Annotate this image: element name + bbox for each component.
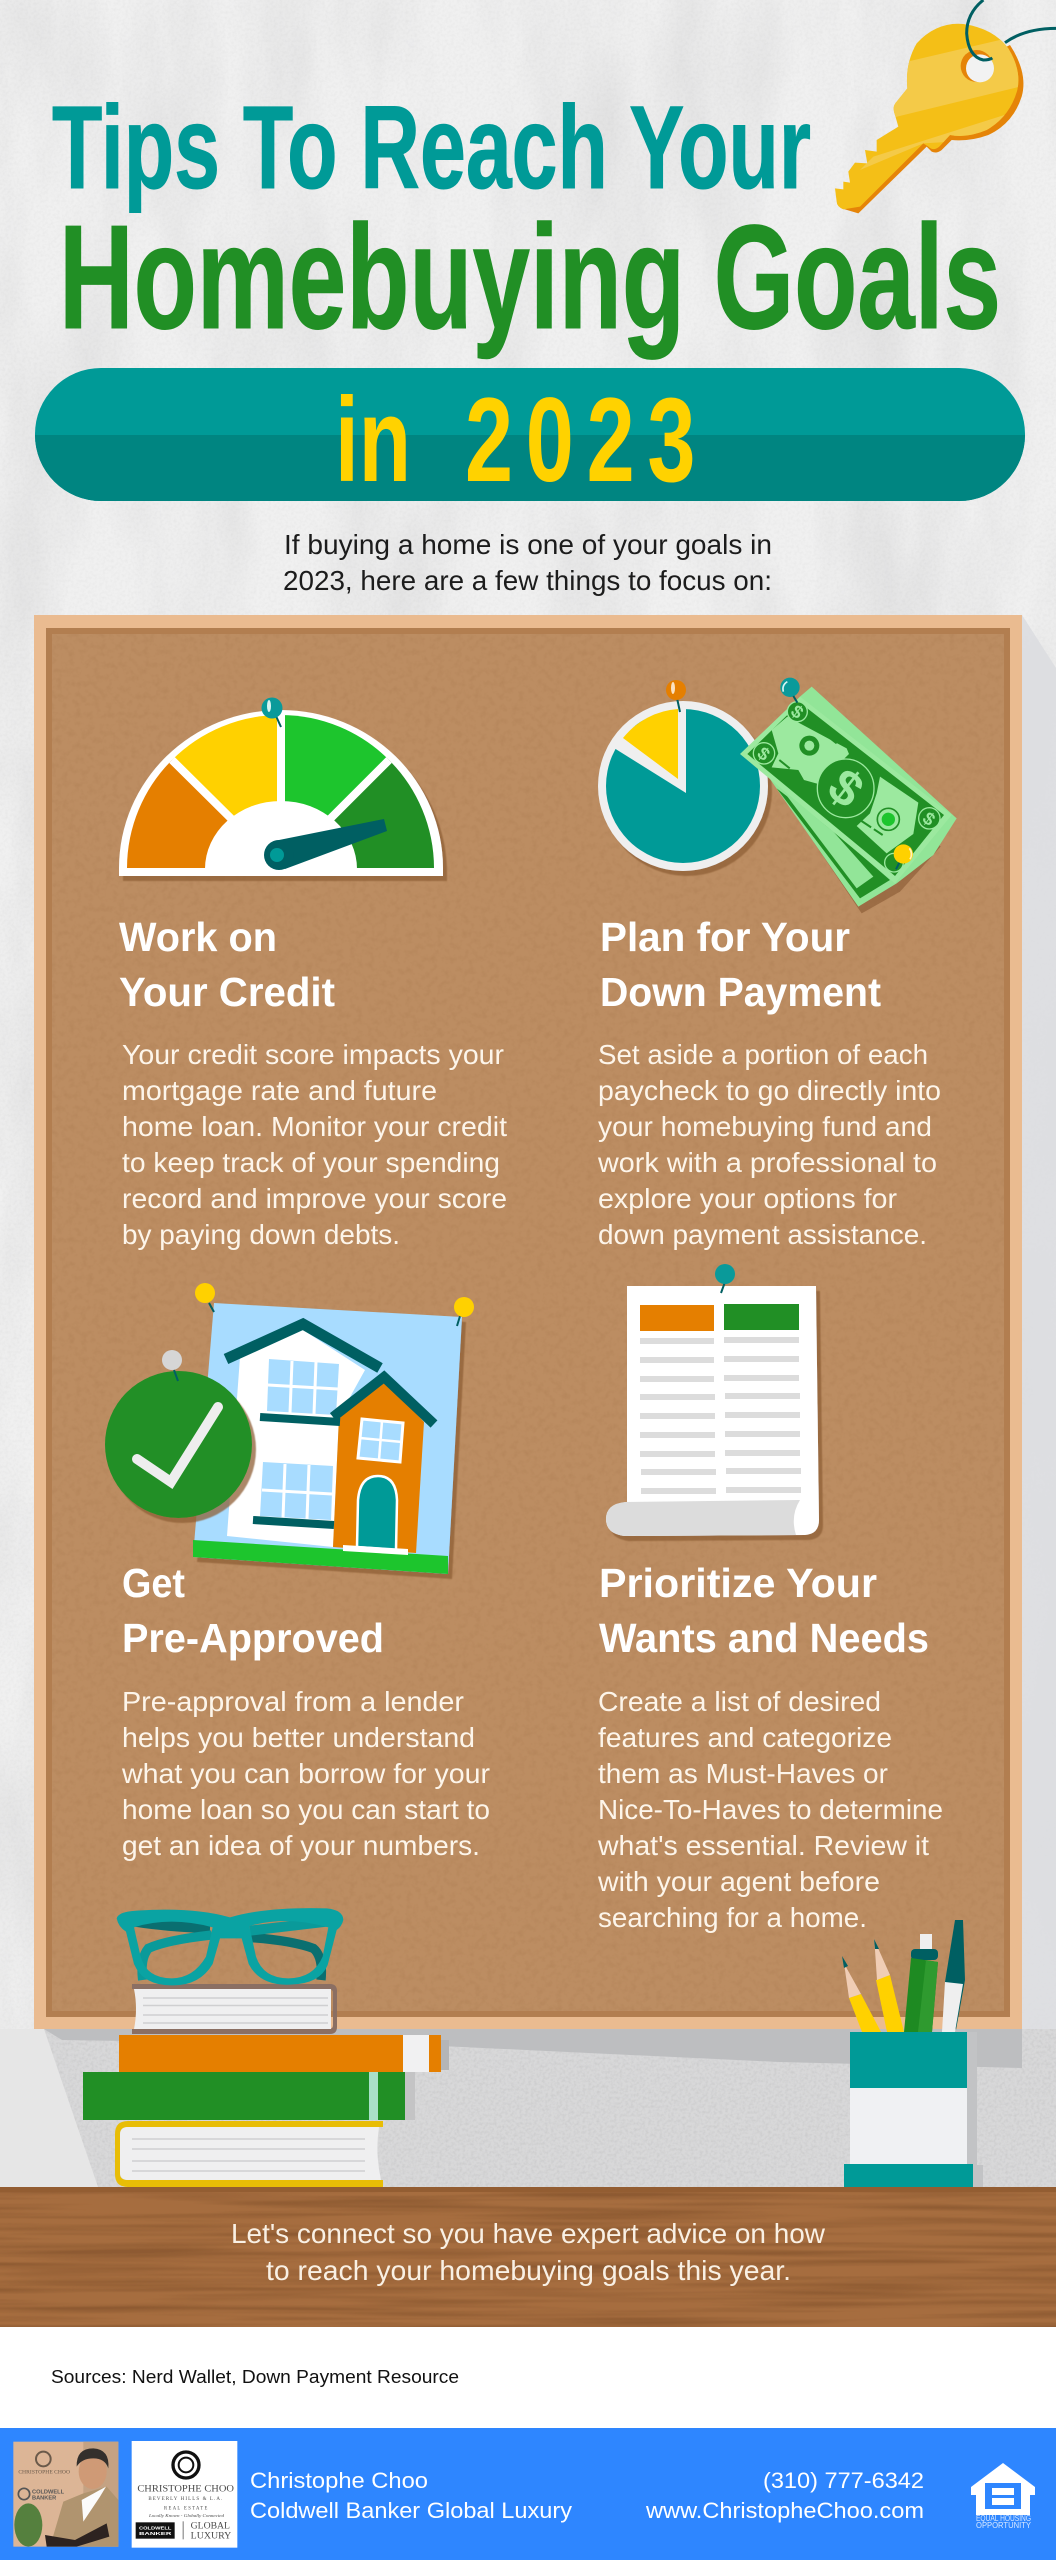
body: wants and needs text: what's essential. Review it bbox=[597, 1830, 929, 1861]
body: down payment text: Set aside a portion of each bbox=[598, 1039, 928, 1070]
body: wants and needs text: features and categorize bbox=[598, 1722, 892, 1753]
agent photo: COLDWELL bbox=[32, 2489, 65, 2495]
heading: Plan for Your Down Payment: Plan for Your bbox=[600, 914, 850, 960]
icon: checklist scroll bbox=[606, 1264, 819, 1536]
body: down payment text bbox=[597, 1039, 941, 1250]
body: pre-approval text: what you can borrow for your bbox=[121, 1758, 490, 1789]
brand logo card: COLDWELL bbox=[139, 2525, 171, 2531]
icon: dollar bills: $ bbox=[753, 743, 774, 765]
panel: corkboard bbox=[34, 615, 1022, 2029]
agent name and company bbox=[250, 2468, 572, 2523]
icon: golden key with cord bbox=[835, 0, 1056, 213]
heading: Get Pre-Approved: Get bbox=[122, 1560, 185, 1606]
heading: Work on Your Credit: Work on bbox=[119, 914, 277, 960]
agent photo: BANKER bbox=[32, 2495, 56, 2501]
body: credit text: by paying down debts. bbox=[122, 1219, 400, 1250]
body: credit text bbox=[122, 1039, 507, 1250]
brand logo card: Locally Known - Globally Connected bbox=[148, 2513, 225, 2518]
body: credit text: home loan. Monitor your credit bbox=[122, 1111, 507, 1142]
contact details: www.ChristopheChoo.com bbox=[645, 2498, 924, 2523]
brand logo card: REAL ESTATE bbox=[164, 2506, 207, 2511]
icon: dollar bills bbox=[740, 678, 957, 913]
heading: Plan for Your Down Payment: Down Payment bbox=[600, 969, 881, 1015]
body: pre-approval text: helps you better understand bbox=[122, 1722, 475, 1753]
card: work on your credit bbox=[119, 698, 507, 1250]
icon: house photo with check badge bbox=[105, 1283, 474, 1574]
sources section: Sources: Nerd Wallet, Down Payment Resource bbox=[51, 2366, 459, 2387]
heading: Plan for Your Down Payment bbox=[600, 914, 881, 1015]
body: pre-approval text: Pre-approval from a lender bbox=[122, 1686, 464, 1717]
icon: stack of books bbox=[83, 1984, 449, 2187]
card: prioritize your wants and needs bbox=[597, 1264, 943, 1933]
icon: dollar bills: $ bbox=[787, 701, 807, 723]
heading: Get Pre-Approved bbox=[122, 1560, 384, 1661]
call to action text: Let's connect so you have expert advice on how bbox=[231, 2218, 825, 2249]
contact details bbox=[645, 2468, 924, 2523]
intro text bbox=[283, 529, 772, 596]
icon: equal housing opportunity bbox=[971, 2463, 1035, 2530]
brand logo card: LUXURY bbox=[191, 2530, 232, 2540]
pencils and pens bbox=[842, 1920, 965, 2032]
heading: Work on Your Credit bbox=[119, 914, 335, 1015]
brand logo card bbox=[132, 2441, 237, 2548]
icon: equal housing opportunity: EQUAL HOUSING bbox=[976, 2514, 1031, 2523]
subtitle pill: in 2023 bbox=[35, 368, 1025, 507]
heading: Prioritize Your Wants and Needs bbox=[599, 1560, 929, 1661]
body: pre-approval text bbox=[121, 1686, 490, 1861]
agent name and company: Christophe Choo bbox=[250, 2468, 428, 2493]
body: wants and needs text: them as Must-Haves or bbox=[598, 1758, 888, 1789]
body: pre-approval text: get an idea of your numbers. bbox=[122, 1830, 480, 1861]
agent name and company: Coldwell Banker Global Luxury bbox=[250, 2498, 572, 2523]
intro text: If buying a home is one of your goals in bbox=[284, 529, 772, 560]
icon: dollar bills: $ bbox=[818, 757, 874, 819]
body: credit text: Your credit score impacts your bbox=[122, 1039, 504, 1070]
heading: Work on Your Credit: Your Credit bbox=[119, 969, 335, 1015]
contact details: (310) 777-6342 bbox=[763, 2468, 924, 2493]
body: wants and needs text: searching for a home. bbox=[598, 1902, 867, 1933]
card: plan for your down payment bbox=[597, 678, 957, 1250]
heading: Prioritize Your Wants and Needs: Prioritize Your bbox=[599, 1560, 877, 1606]
body: credit text: to keep track of your spending bbox=[122, 1147, 500, 1178]
body: wants and needs text: with your agent before bbox=[597, 1866, 880, 1897]
title bbox=[52, 82, 1001, 360]
icon: pie chart bbox=[598, 680, 768, 871]
brand logo card: CHRISTOPHE CHOO bbox=[137, 2484, 234, 2494]
body: down payment text: your homebuying fund and bbox=[598, 1111, 932, 1142]
card: get pre-approved bbox=[105, 1283, 490, 1861]
heading: Prioritize Your Wants and Needs: Wants and Needs bbox=[599, 1615, 929, 1661]
icon: dollar bills: $ bbox=[919, 808, 939, 830]
subtitle pill: in 2023: 2023 bbox=[465, 373, 708, 507]
agent photo: CHRISTOPHE CHOO bbox=[18, 2470, 70, 2475]
heading: Get Pre-Approved: Pre-Approved bbox=[122, 1615, 384, 1661]
brand logo card: GLOBAL bbox=[191, 2521, 230, 2531]
body: pre-approval text: home loan so you can start to bbox=[122, 1794, 490, 1825]
body: credit text: mortgage rate and future bbox=[122, 1075, 437, 1106]
brand logo card: BEVERLY HILLS & L.A. bbox=[148, 2497, 222, 2502]
body: wants and needs text: Create a list of desired bbox=[598, 1686, 881, 1717]
call to action text bbox=[231, 2218, 825, 2286]
body: down payment text: paycheck to go directly into bbox=[598, 1075, 941, 1106]
body: down payment text: work with a professional to bbox=[597, 1147, 937, 1178]
intro text: 2023, here are a few things to focus on: bbox=[283, 565, 772, 596]
subtitle pill: in 2023: in bbox=[335, 373, 411, 507]
body: down payment text: explore your options for bbox=[598, 1183, 897, 1214]
shelf: wood banner bbox=[0, 2187, 1056, 2327]
agent photo bbox=[13, 2442, 118, 2547]
body: wants and needs text bbox=[597, 1686, 943, 1933]
body: down payment text: down payment assistance. bbox=[598, 1219, 927, 1250]
icon: equal housing opportunity: OPPORTUNITY bbox=[976, 2521, 1032, 2530]
brand logo card: BANKER bbox=[139, 2531, 172, 2537]
call to action text: to reach your homebuying goals this year. bbox=[266, 2255, 791, 2286]
body: wants and needs text: Nice-To-Haves to determine bbox=[598, 1794, 943, 1825]
sources section bbox=[0, 2327, 1056, 2429]
body: credit text: record and improve your score bbox=[122, 1183, 507, 1214]
icon: credit score gauge bbox=[119, 698, 443, 876]
footer bar bbox=[0, 2428, 1056, 2560]
icon: glasses bbox=[117, 1908, 343, 1985]
icon: pencil cup bbox=[842, 1920, 983, 2187]
